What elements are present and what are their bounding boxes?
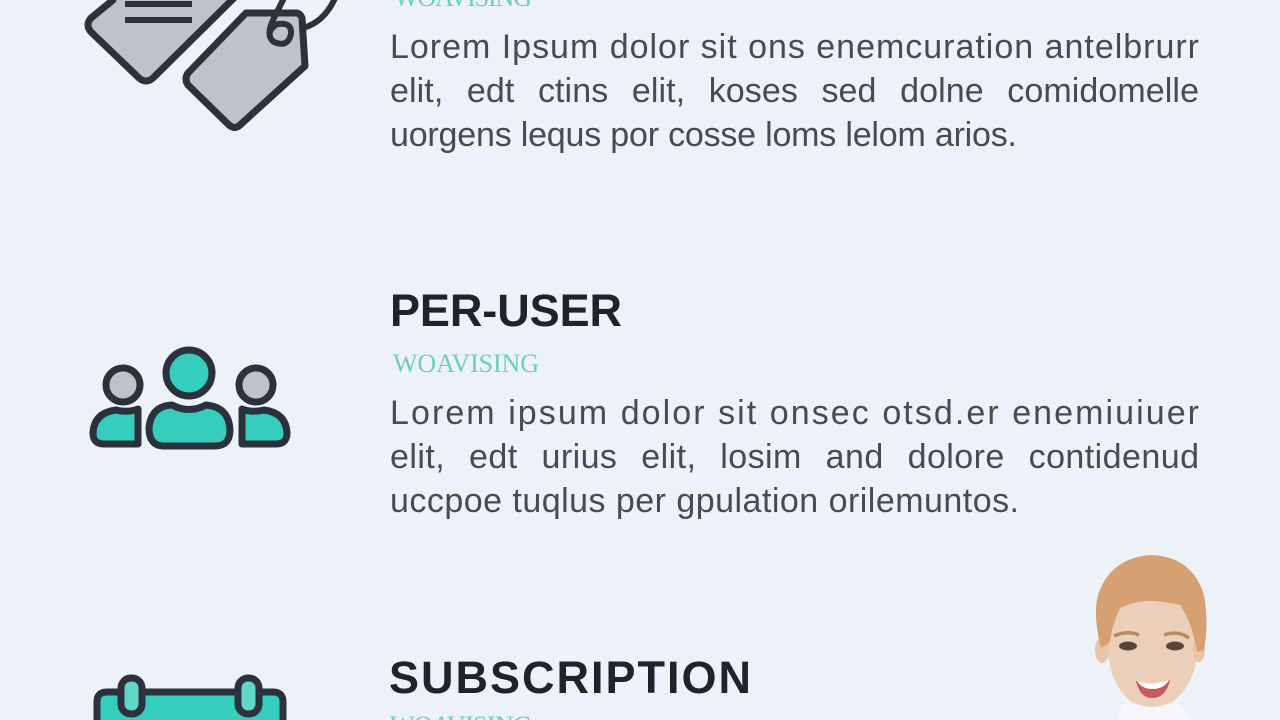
body text: per-user: uccpoe tuqlus per gpulation orilemuntos.: [390, 482, 1019, 520]
text block: first model description: [390, 0, 1199, 154]
body text: per-user: elit, edt urius elit, losim and dolore contidenud: [390, 438, 1199, 476]
icon: group of three users: [93, 350, 287, 446]
subheading: per-user: WOAVISING: [393, 349, 539, 378]
text block: subscription model: [389, 652, 751, 720]
body text: first model: uorgens lequs por cosse loms lelom arios.: [390, 116, 1017, 154]
body text: first model: [390, 28, 1199, 154]
heading: PER-USER: PER-USER: [390, 285, 622, 336]
body text: per-user: [390, 394, 1199, 520]
body text: per-user: Lorem ipsum dolor sit onsec otsd.er enemiuiuer: [390, 394, 1199, 432]
body text: first model: elit, edt ctins elit, koses sed dolne comidomelle: [390, 72, 1199, 110]
heading: SUBSCRIPTION: SUBSCRIPTION: [389, 652, 751, 703]
icon: price tags: [88, 0, 336, 128]
text block: per-user model: [390, 285, 1199, 520]
icon: calendar: [97, 678, 283, 720]
body text: first model: Lorem Ipsum dolor sit ons enemcuration antelbrurr: [390, 28, 1199, 66]
illustration: smiling person: [1095, 555, 1206, 720]
